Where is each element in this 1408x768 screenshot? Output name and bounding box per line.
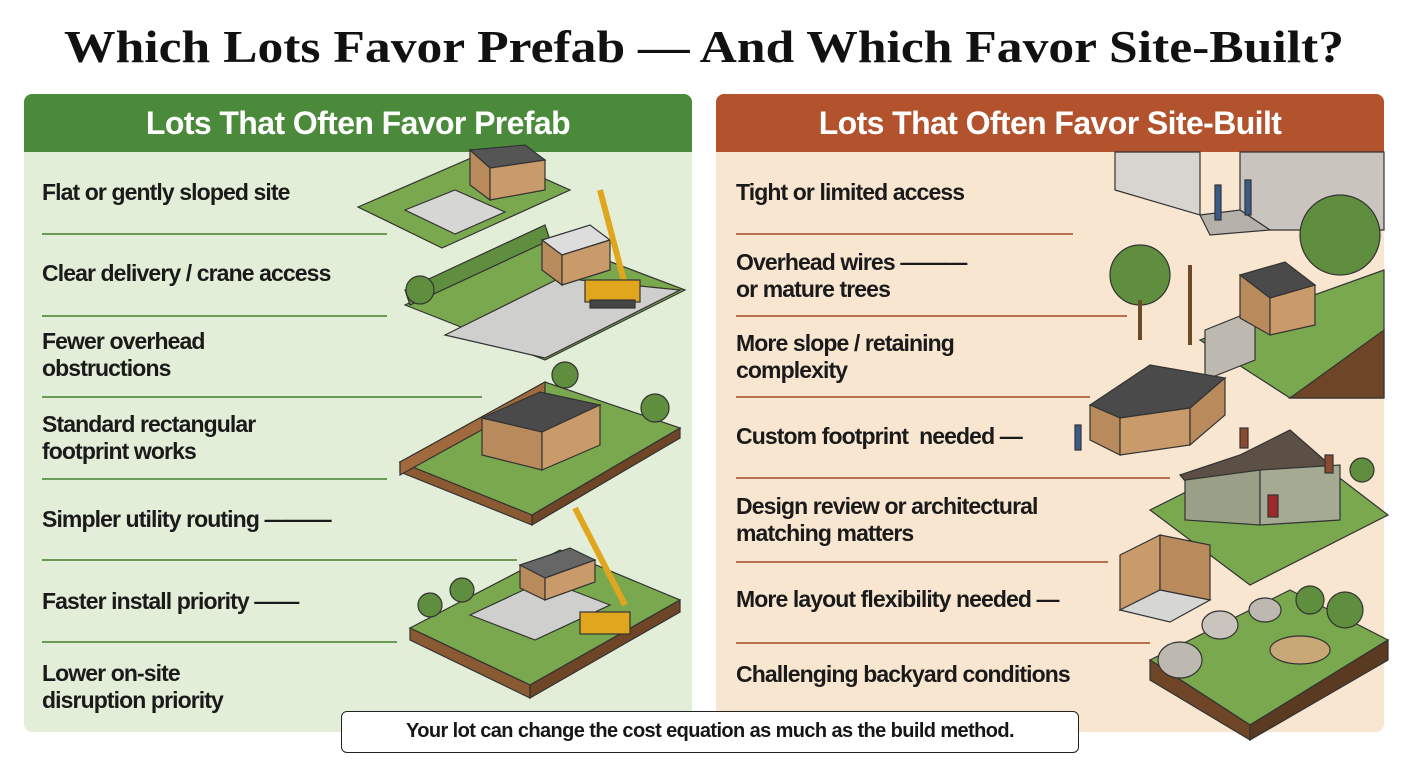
- icon: crane delivery: [405, 190, 685, 360]
- heading: site-built: [716, 94, 1384, 152]
- callout: footer: [341, 711, 1079, 753]
- text: prefab items: Clear delivery / crane access: [42, 260, 330, 286]
- text: site-built items: More layout flexibility needed —: [736, 586, 1059, 612]
- icon: framing: [1120, 535, 1210, 622]
- text: site-built items: More slope / retaining: [736, 330, 954, 356]
- text: site-built items: [736, 179, 1070, 687]
- text: prefab items: Fewer overhead: [42, 328, 205, 354]
- text: site-built items: or mature trees: [736, 276, 890, 302]
- text: site-built items: Tight or limited access: [736, 179, 964, 205]
- text: prefab items: Lower on-site: [42, 660, 180, 686]
- text: site-built items: Overhead wires ———: [736, 249, 966, 275]
- icon: custom footprint house: [1075, 365, 1225, 455]
- panel: site-built: [716, 94, 1384, 732]
- text: site-built items: matching matters: [736, 520, 913, 546]
- callout: footer: Your lot can change the cost equation as much as the build method.: [406, 720, 1014, 742]
- heading: prefab: Lots That Often Favor Prefab: [146, 105, 570, 141]
- text: site-built items: Custom footprint needed —: [736, 423, 1022, 449]
- text: prefab items: disruption priority: [42, 687, 223, 713]
- text: prefab items: obstructions: [42, 355, 170, 381]
- text: site-built items: Challenging backyard conditions: [736, 661, 1070, 687]
- icon: tight access: [1115, 152, 1384, 235]
- title: Which Lots Favor Prefab — And Which Favor Site-Built?: [64, 21, 1344, 72]
- heading: site-built: Lots That Often Favor Site-Built: [819, 105, 1281, 141]
- icon: traditional house: [1150, 428, 1388, 585]
- text: prefab items: footprint works: [42, 438, 196, 464]
- text: prefab items: Flat or gently sloped site: [42, 179, 290, 205]
- text: site-built items: complexity: [736, 357, 847, 383]
- text: site-built items: Design review or architectural: [736, 493, 1038, 519]
- text: prefab items: Faster install priority ——: [42, 588, 298, 614]
- text: prefab items: Standard rectangular: [42, 411, 255, 437]
- icon: crane install: [410, 508, 680, 698]
- icon: trees and slope: [1110, 195, 1384, 398]
- panel: prefab: [24, 94, 692, 732]
- icon: flat lot: [358, 145, 570, 248]
- heading: prefab: [24, 94, 692, 152]
- text: prefab items: Simpler utility routing ———: [42, 506, 331, 532]
- icon: rocky backyard: [1150, 586, 1388, 740]
- text: prefab items: [42, 179, 332, 713]
- icon: fenced yard: [400, 362, 680, 525]
